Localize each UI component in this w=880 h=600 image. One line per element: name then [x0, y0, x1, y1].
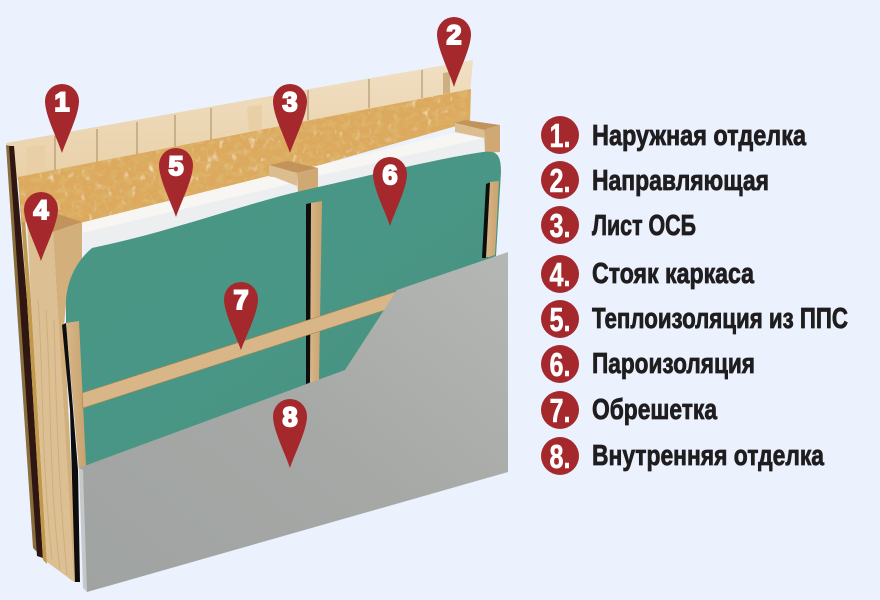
pin 7: [224, 282, 258, 350]
pin 5: [159, 148, 193, 217]
map pins: [24, 17, 471, 468]
pin 6: 6: [382, 160, 398, 190]
legend item 5: 5.: [550, 301, 570, 338]
legend item 6: Пароизоляция: [592, 348, 755, 380]
pin 5: 5: [168, 151, 184, 181]
OSB sheet: [18, 89, 471, 225]
pin 4: 4: [33, 195, 49, 225]
legend item 8: [541, 437, 825, 475]
legend item 8: 8.: [550, 438, 570, 475]
legend item 3: 3.: [550, 207, 570, 244]
pin 6: [373, 157, 407, 226]
insulation: right section: [313, 133, 484, 189]
legend item 5: [541, 300, 848, 338]
side edge layers: [6, 145, 47, 564]
pin 1: 1: [54, 87, 70, 117]
legend item 7: Обрешетка: [592, 394, 718, 426]
pin 4: [24, 192, 58, 261]
pin 7: 7: [233, 285, 249, 315]
legend item 6: [541, 345, 755, 383]
legend item 1: 1.: [550, 117, 570, 154]
legend: [541, 116, 848, 475]
legend item 1: Наружная отделка: [592, 120, 807, 152]
pin 3: [273, 84, 307, 153]
pin 3: 3: [282, 87, 298, 117]
legend item 3: Лист ОСБ: [592, 210, 696, 242]
pin 8: 8: [282, 402, 298, 432]
legend item 7: 7.: [550, 392, 570, 429]
legend item 3: [541, 206, 696, 244]
pin 8: [273, 399, 307, 468]
pin 1: [45, 84, 79, 153]
pin 2: 2: [446, 20, 462, 50]
legend item 4: [541, 255, 755, 293]
legend item 2: [541, 161, 769, 199]
interior finish: [79, 252, 508, 592]
insulation: left section: [80, 176, 298, 252]
legend item 2: 2.: [550, 162, 570, 199]
frame studs: [27, 120, 500, 582]
pin 2: [437, 17, 471, 87]
lathing: horizontal batten: [82, 291, 398, 408]
outer cladding: [6, 60, 473, 180]
lathing: vertical battens: [66, 181, 499, 470]
legend item 1: [541, 116, 807, 154]
vapour barrier: [66, 152, 501, 468]
legend item 2: Направляющая: [592, 165, 769, 197]
legend item 8: Внутренняя отделка: [592, 440, 825, 472]
legend item 4: 4.: [550, 256, 570, 293]
black gaps behind battens: [62, 182, 491, 582]
legend item 7: [541, 391, 718, 429]
wall cross-section illustration: [6, 60, 508, 592]
legend item 4: Стояк каркаса: [592, 258, 755, 290]
legend item 6: 6.: [550, 346, 570, 383]
